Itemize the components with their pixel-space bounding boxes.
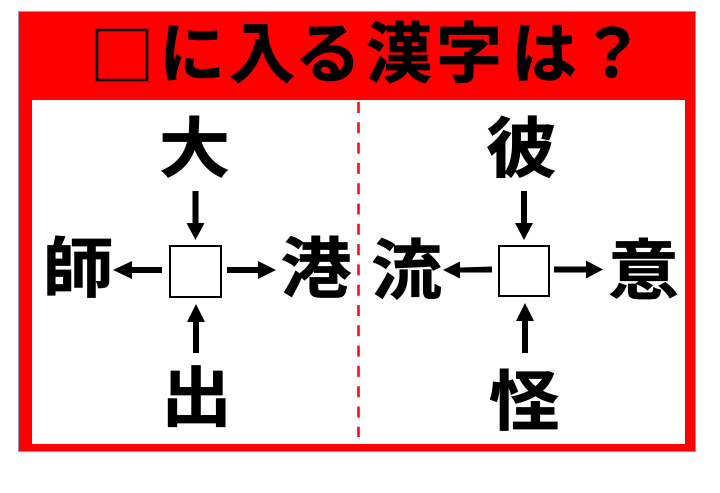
kanji left: 師: [43, 233, 113, 306]
arrow right: [554, 260, 603, 278]
arrow down: [515, 191, 533, 240]
kanji right: 港: [281, 233, 351, 306]
arrow left: [443, 262, 492, 278]
kanji right: 意: [608, 235, 679, 308]
arrow right: [227, 261, 276, 279]
arrow up: [516, 303, 534, 353]
white puzzle panel: [32, 100, 685, 444]
right puzzle: [371, 113, 679, 439]
kanji top: 彼: [486, 113, 557, 186]
title blank square: [97, 30, 147, 80]
title text: に入る漢字は？: [159, 17, 645, 91]
blank square: [499, 246, 549, 296]
arrow up: [187, 304, 205, 353]
kanji left: 流: [371, 235, 442, 308]
kanji top: 大: [159, 113, 230, 186]
blank square: [170, 246, 221, 297]
dashed divider: [357, 102, 360, 437]
kanji bottom: 出: [161, 362, 232, 435]
kanji bottom: 怪: [489, 366, 559, 439]
arrow down: [186, 191, 204, 240]
arrow left: [113, 261, 162, 279]
title: [97, 17, 645, 91]
left puzzle: [43, 113, 351, 435]
